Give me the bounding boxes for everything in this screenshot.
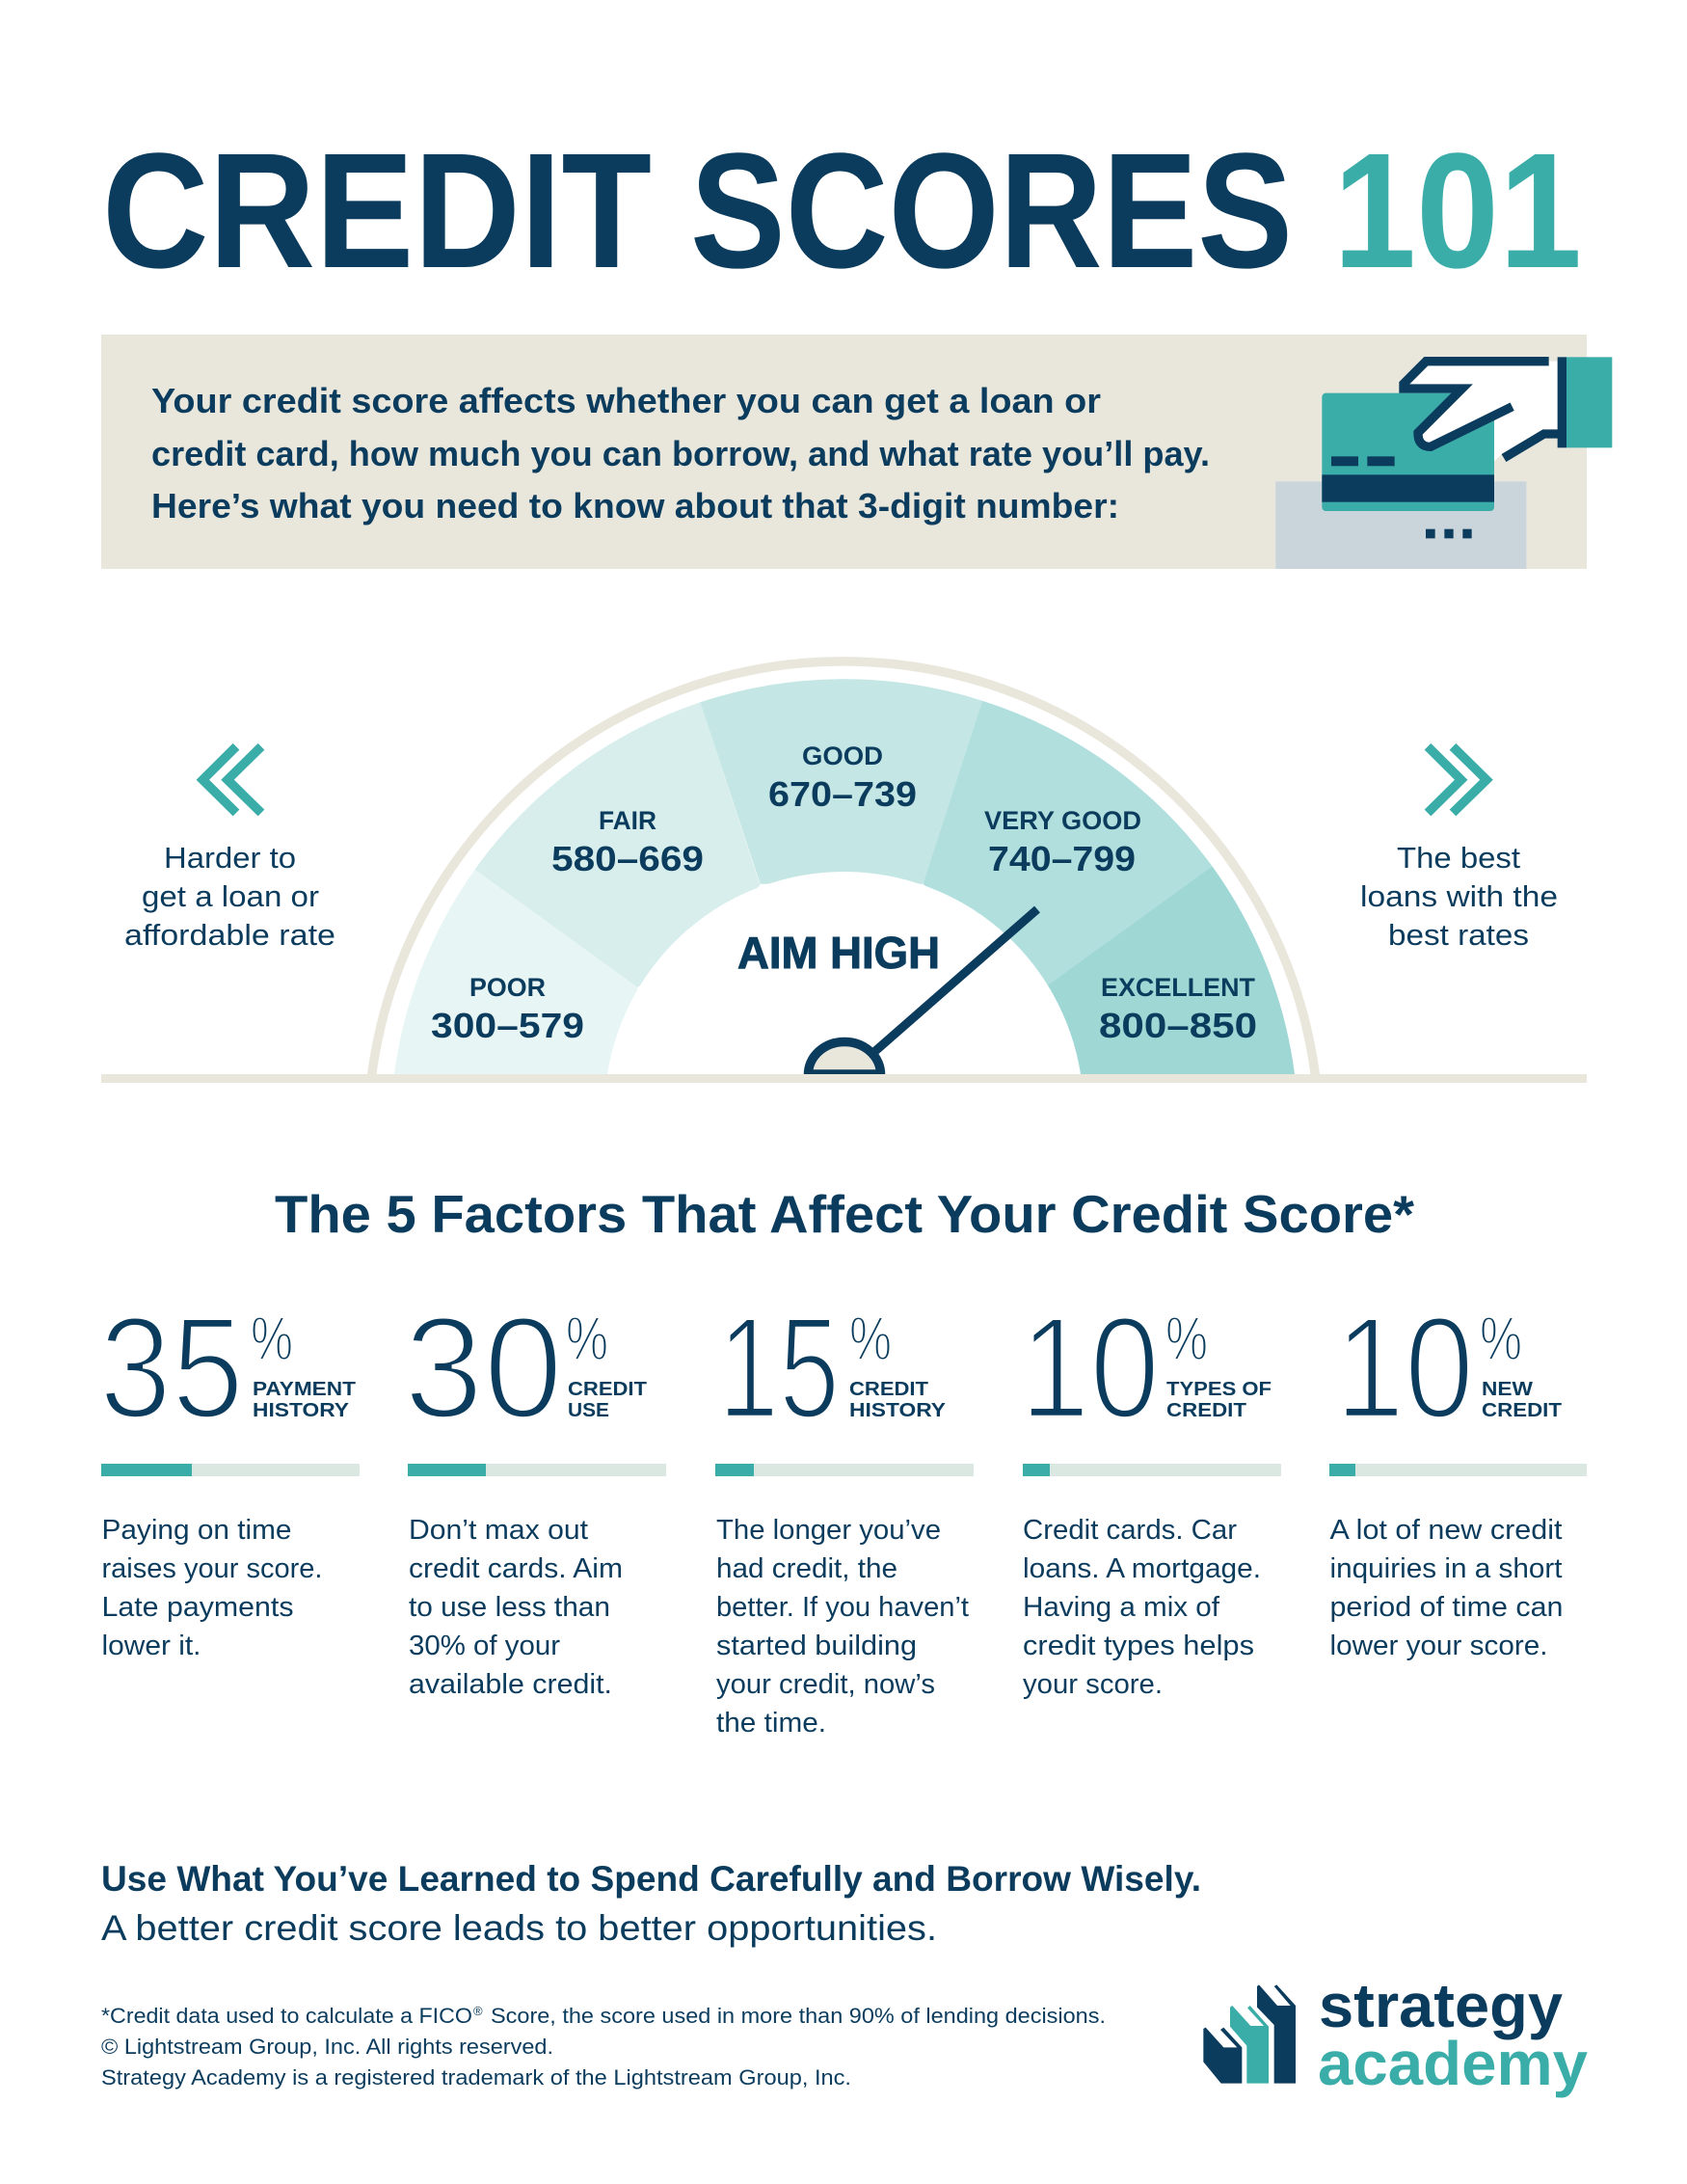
figure: 15 percent: 15 — [718, 1286, 840, 1448]
label: fair: FAIR — [599, 806, 656, 835]
bar: 30 percent — [408, 1464, 666, 1476]
panel: intro — [101, 335, 1612, 569]
footnote: *Credit data used to calculate a FICO — [101, 2004, 472, 2028]
factor: credit use — [404, 1286, 666, 1700]
title: CREDIT — [102, 120, 652, 303]
description: credit use: to use less than — [409, 1592, 610, 1623]
figure: 10 percent new credit: 10 — [1335, 1286, 1474, 1448]
label: good: 670–739 — [768, 774, 917, 814]
label: credit use: USE — [568, 1400, 609, 1421]
heading: five factors: The 5 Factors That Affect Your Credit Score* — [275, 1184, 1415, 1244]
logo: strategy academy — [1203, 1971, 1588, 2098]
footnote: Strategy Academy is a registered trademark of the Lightstream Group, Inc. — [101, 2065, 851, 2090]
label: very good: VERY GOOD — [984, 806, 1141, 835]
label: credit use: CREDIT — [568, 1379, 647, 1400]
closing statement — [101, 1859, 1201, 1948]
label: fair: 580–669 — [551, 839, 704, 878]
label: payment history: PAYMENT — [253, 1379, 356, 1400]
label: types of credit — [1166, 1379, 1272, 1421]
text: best loans: The best — [1397, 841, 1520, 875]
description: credit history — [716, 1515, 969, 1739]
figure: 10 percent new credit: % — [1480, 1304, 1522, 1373]
label: credit history: CREDIT — [849, 1379, 928, 1400]
label: excellent: EXCELLENT — [1101, 973, 1256, 1002]
text: harder to get a loan: Harder to — [164, 841, 296, 875]
description: new credit: period of time can — [1330, 1592, 1564, 1623]
factor: payment history — [99, 1286, 360, 1661]
closing statement: Use What You’ve Learned to Spend Carefully and Borrow Wisely. — [101, 1859, 1201, 1899]
label: very good: 740–799 — [988, 839, 1136, 878]
figure: 10 percent: % — [1165, 1304, 1208, 1373]
label: excellent: 800–850 — [1099, 1006, 1257, 1045]
wordmark — [1318, 1971, 1588, 2098]
title: SCORES — [690, 120, 1293, 303]
label: credit use — [568, 1379, 647, 1421]
description: new credit — [1330, 1515, 1564, 1661]
description: new credit: lower your score. — [1330, 1631, 1548, 1661]
label: poor: POOR — [469, 973, 546, 1002]
intro text: Your credit score affects whether you can get a loan or — [151, 381, 1101, 420]
needle — [800, 909, 1037, 1083]
label: fair — [551, 806, 704, 878]
intro text: Here’s what you need to know about that 3-digit number: — [151, 486, 1119, 526]
figure: 15 percent: % — [849, 1304, 892, 1373]
text: best loans: best rates — [1388, 918, 1529, 952]
label: good: GOOD — [802, 741, 883, 770]
description: credit use: Don’t max out — [409, 1515, 588, 1546]
description: payment history: raises your score. — [102, 1553, 322, 1584]
description: credit history: The longer you’ve — [716, 1515, 941, 1546]
description: types of credit — [1023, 1515, 1261, 1700]
footnote: ® — [473, 2004, 483, 2018]
factor: new credit — [1329, 1286, 1587, 1661]
intro text: credit card, how much you can borrow, and what rate you’ll pay. — [151, 434, 1210, 473]
description: payment history — [102, 1515, 322, 1661]
wordmark: academy — [1318, 2029, 1588, 2098]
label: types of credit: TYPES OF — [1166, 1379, 1272, 1400]
description: payment history: Paying on time — [102, 1515, 291, 1546]
label: credit history: HISTORY — [849, 1400, 947, 1421]
bar: 15 percent — [715, 1464, 974, 1476]
closing statement: A better credit score leads to better opportunities. — [101, 1908, 937, 1948]
factor: types of credit — [1020, 1286, 1281, 1700]
description: credit history: the time. — [716, 1708, 826, 1739]
description: types of credit: credit types helps — [1023, 1631, 1254, 1661]
label: good — [768, 741, 917, 814]
label: aim high: AIM HIGH — [737, 928, 940, 978]
factor: credit history — [715, 1286, 974, 1739]
label: poor: 300–579 — [431, 1006, 584, 1045]
figure: 35 percent: % — [251, 1304, 293, 1373]
label: payment history: HISTORY — [253, 1400, 350, 1421]
description: credit history: started building — [716, 1631, 917, 1661]
description: new credit: A lot of new credit — [1330, 1515, 1563, 1546]
intro text — [151, 381, 1210, 526]
description: types of credit: your score. — [1023, 1669, 1163, 1700]
description: credit history: your credit, now’s — [716, 1669, 935, 1700]
icon: books — [1203, 1984, 1296, 2084]
icon: right double chevron — [1428, 746, 1486, 813]
description: types of credit: Having a mix of — [1023, 1592, 1219, 1623]
figure: 30 percent: % — [566, 1304, 608, 1373]
wordmark: strategy — [1319, 1971, 1563, 2040]
figure: 10 percent: 10 — [1020, 1286, 1160, 1448]
gauge segment: very good — [923, 701, 1212, 985]
gauge segment: fair — [475, 702, 761, 987]
label: excellent — [1099, 973, 1257, 1045]
bar: types of credit — [1023, 1464, 1281, 1476]
baseline — [101, 1074, 1587, 1083]
description: credit history: better. If you haven’t — [716, 1592, 969, 1623]
text: harder to get a loan: get a loan or — [142, 879, 319, 913]
description: credit use: available credit. — [409, 1669, 612, 1700]
footnote — [101, 2004, 1106, 2090]
text: harder to get a loan: affordable rate — [124, 918, 335, 952]
label: new credit: NEW — [1482, 1379, 1533, 1400]
label: very good — [984, 806, 1141, 878]
description: credit use — [409, 1515, 623, 1700]
label: credit history — [849, 1379, 947, 1421]
gauge outer arch — [372, 661, 1315, 1076]
label: types of credit: CREDIT — [1166, 1400, 1246, 1421]
description: credit history: had credit, the — [716, 1553, 897, 1584]
gauge — [101, 661, 1587, 1083]
gauge segment: good — [700, 679, 982, 884]
title — [102, 120, 1582, 303]
label: new credit: CREDIT — [1482, 1400, 1562, 1421]
gauge segment: excellent — [1048, 866, 1295, 1074]
figure: 30 percent: 30 — [404, 1286, 563, 1448]
description: new credit: inquiries in a short — [1330, 1553, 1563, 1584]
figure: 35 percent: 35 — [99, 1286, 244, 1448]
bar: new credit — [1329, 1464, 1587, 1476]
gauge segment: poor — [394, 870, 637, 1074]
description: types of credit: loans. A mortgage. — [1023, 1553, 1261, 1584]
description: payment history: Late payments — [102, 1592, 293, 1623]
icon: hand inserting credit card — [1275, 357, 1612, 569]
description: payment history: lower it. — [102, 1631, 201, 1661]
icon: left double chevron — [202, 746, 261, 813]
footnote: © Lightstream Group, Inc. All rights reserved. — [101, 2035, 553, 2059]
label: payment history — [253, 1379, 356, 1421]
gauge centre — [607, 872, 1081, 1074]
text: best loans — [1360, 841, 1558, 952]
description: credit use: credit cards. Aim — [409, 1553, 623, 1584]
label: new credit — [1482, 1379, 1562, 1421]
text: harder to get a loan — [124, 841, 335, 952]
description: types of credit: Credit cards. Car — [1023, 1515, 1238, 1546]
bar: 35 percent — [101, 1464, 360, 1476]
text: best loans: loans with the — [1360, 879, 1558, 913]
title: 101 — [1333, 120, 1582, 303]
description: credit use: 30% of your — [409, 1631, 561, 1661]
label: poor — [431, 973, 584, 1045]
footnote: Score, the score used in more than 90% of lending decisions. — [491, 2004, 1106, 2028]
